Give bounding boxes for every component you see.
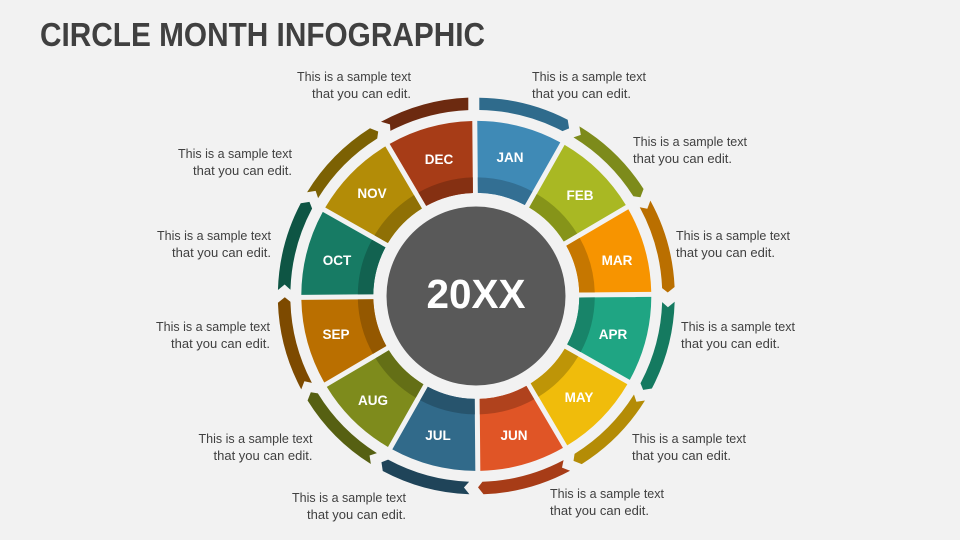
- segment: JUN: JUN: [500, 428, 528, 443]
- text block: JUN: [550, 486, 664, 518]
- segment: SEP: [282, 268, 397, 383]
- text block: NOV: This is a sample text: [178, 146, 292, 161]
- text block: JUL: This is a sample text: [292, 490, 406, 505]
- segment: MAR: MAR: [602, 253, 633, 268]
- segment: AUG: AUG: [358, 393, 388, 408]
- text block: APR: that you can edit.: [681, 336, 780, 351]
- arrow: JUN: [477, 442, 570, 514]
- segment: JUL: JUL: [425, 428, 451, 443]
- segment: FEB: FEB: [566, 188, 594, 203]
- text block: MAR: This is a sample text: [676, 228, 790, 243]
- text block: MAY: This is a sample text: [632, 431, 746, 446]
- segment: OCT: [301, 211, 386, 295]
- text block: NOV: [178, 146, 292, 178]
- arrow: FEB: [563, 126, 656, 200]
- segment: DEC: DEC: [425, 152, 453, 167]
- segment: JUL: [392, 386, 475, 472]
- text block: DEC: This is a sample text: [297, 69, 411, 84]
- arrow: SEP: [258, 296, 331, 389]
- text block: JAN: [532, 69, 646, 101]
- segment: JAN: [477, 120, 561, 205]
- text block: JAN: This is a sample text: [532, 69, 646, 84]
- text block: MAY: [632, 431, 746, 463]
- text block: SEP: This is a sample text: [156, 319, 270, 334]
- segment: JAN: JAN: [496, 150, 524, 165]
- text block: AUG: that you can edit.: [214, 448, 312, 463]
- segment: AUG: [316, 333, 430, 447]
- arrow: MAR: [621, 201, 695, 294]
- segment: DEC: [390, 102, 504, 217]
- text block: JAN: that you can edit.: [532, 86, 631, 101]
- segment: OCT: OCT: [323, 253, 352, 268]
- text block: JUN: This is a sample text: [550, 486, 664, 501]
- arrow: MAY: [571, 383, 645, 477]
- arrow: AUG: [295, 390, 388, 464]
- text block: AUG: This is a sample text: [198, 431, 313, 446]
- text block: OCT: [157, 228, 271, 260]
- text block: DEC: that you can edit.: [312, 86, 411, 101]
- arrow: NOV: [307, 116, 381, 209]
- text block: FEB: This is a sample text: [633, 134, 747, 149]
- text block: MAR: that you can edit.: [676, 245, 775, 260]
- segment: MAR: [555, 209, 670, 324]
- text block: NOV: that you can edit.: [193, 163, 292, 178]
- arrow: OCT: [278, 202, 312, 290]
- text block: JUN: that you can edit.: [550, 503, 649, 518]
- text block: AUG: [198, 431, 313, 463]
- center circle: 20XX: [386, 206, 566, 386]
- text block: MAR: [676, 228, 790, 260]
- segment: MAY: [513, 343, 627, 456]
- arrow: APR: [640, 302, 675, 390]
- segment: APR: APR: [599, 327, 627, 342]
- arrow: JAN: [479, 98, 569, 131]
- text block: JUL: [292, 490, 406, 522]
- text block: FEB: [633, 134, 747, 166]
- text block: APR: [681, 319, 795, 351]
- segment: APR: [567, 297, 652, 380]
- text block: OCT: that you can edit.: [172, 245, 271, 260]
- segment: JUN: [449, 375, 563, 490]
- text block: APR: This is a sample text: [681, 319, 795, 334]
- segment: FEB: [523, 145, 637, 259]
- text block: JUL: that you can edit.: [307, 507, 406, 522]
- segment: NOV: [325, 135, 440, 249]
- text block: SEP: [156, 319, 270, 351]
- text block: FEB: that you can edit.: [633, 151, 732, 166]
- title: CIRCLE MONTH INFOGRAPHIC: [40, 16, 485, 53]
- segment: NOV: NOV: [357, 186, 387, 201]
- segment: MAY: MAY: [565, 390, 593, 405]
- arrow: DEC: [381, 98, 468, 131]
- text block: SEP: that you can edit.: [171, 336, 270, 351]
- segment: SEP: SEP: [322, 327, 350, 342]
- text block: DEC: [297, 69, 411, 101]
- arrow: JUL: [381, 460, 470, 494]
- text block: OCT: This is a sample text: [157, 228, 271, 243]
- center circle: 20XX: 20XX: [426, 271, 526, 317]
- text block: MAY: that you can edit.: [632, 448, 731, 463]
